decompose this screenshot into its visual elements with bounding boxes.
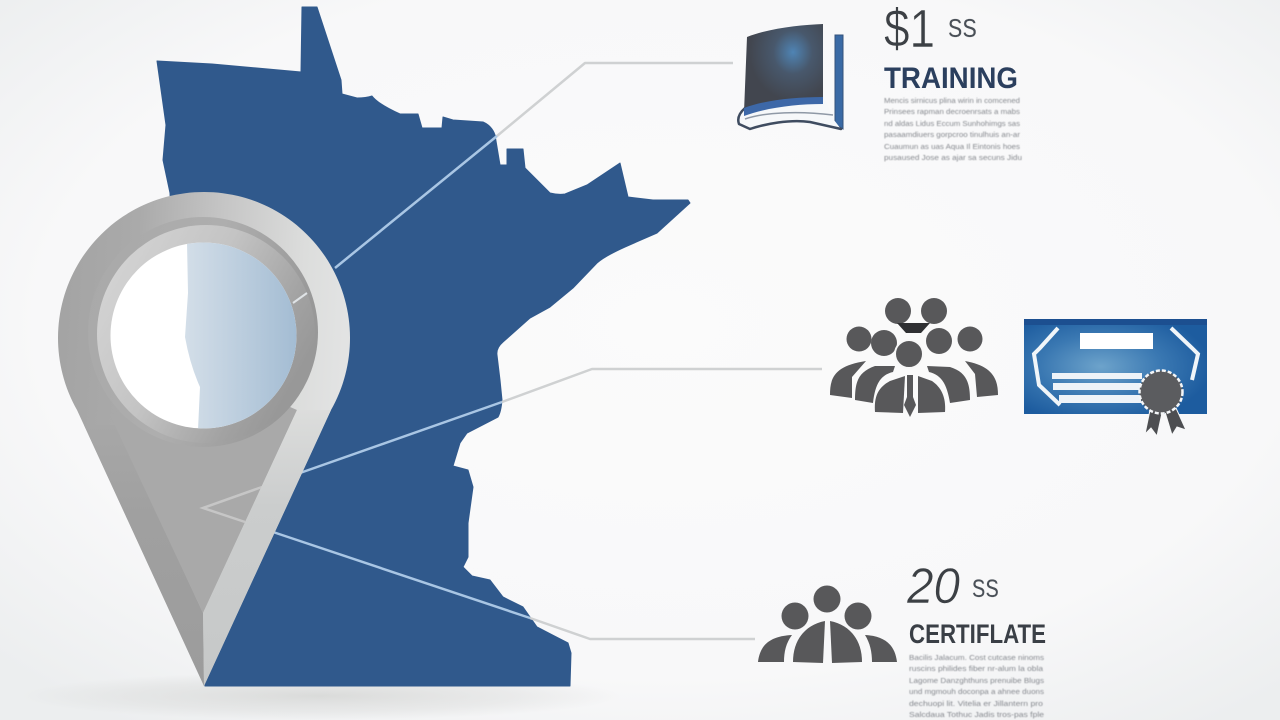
book page outline [738,108,841,129]
training value [884,0,977,59]
pin inner ring [88,217,318,447]
leader line to group and diploma [300,369,822,473]
lens [110,242,298,430]
lens leader segment [293,293,307,303]
book cover [744,24,823,112]
book cover blue edge [744,97,823,116]
location pin [58,192,350,686]
training body text: pasaamdiuers gorpcroo tinulhuis an-ar [884,132,1021,139]
crowd graduation cap [897,323,930,333]
diploma seal [1140,370,1182,414]
leader line to certificate [273,532,755,639]
icon: diploma [1024,319,1207,436]
certificate body text: und mgmouh doconpa a ahnee duons [909,689,1045,696]
icon: group of three people [758,586,897,663]
certificate body text: dechuopi lit. Vitelia er Jillantern pro [909,701,1043,708]
certificate heading: CERTIFLATE [909,619,1046,649]
certificate value: ss [972,567,999,604]
training body text: pusaused Jose as ajar sa secuns Jidu [884,155,1022,162]
diploma sheet [1024,319,1207,414]
training body text: Cuaumun as uas Aqua Il Eintonis hoes [884,144,1021,151]
training body text: nd aldas Lidus Eccum Sunhohimgs sas [884,121,1021,128]
book pages [738,95,841,129]
certificate value [906,558,999,614]
training heading: TRAINING [884,62,1018,95]
diploma ribbon tails [1145,408,1186,436]
lens rim [97,225,315,443]
certificate body text: ruscins philides fiber nr-alum la obla [909,666,1043,673]
certificate value: 20 [906,558,960,614]
diploma frame [1034,328,1198,405]
certificate body text: Bacilis Jalacum. Cost cutcase ninoms [909,655,1045,662]
diploma text lines [1052,373,1142,403]
group bodies [758,621,897,663]
pin ground shadow [20,672,620,720]
certificate body text: Lagome Danzghthuns prenuibe Blugs [909,678,1045,685]
book spine [835,35,843,129]
training block [884,0,1022,162]
lens map reflection [185,242,298,430]
leader lines [273,63,822,639]
training body text: Prinsees rapman decroenrsats a mabs [884,109,1021,116]
icon: book [738,24,843,129]
training value: $1 [884,0,935,59]
leader line to training [335,63,733,268]
pin right facet [203,410,331,686]
pin leader segments [203,487,262,522]
crowd bodies [830,361,998,417]
certificate block [906,558,1046,719]
training body text: Mencis sirnicus plina wirin in comcened [884,98,1020,105]
certificate body text [909,655,1045,719]
pin front face [110,370,297,613]
pin left facet [84,425,204,686]
book page line [745,113,833,119]
group heads [782,586,872,630]
crowd heads [846,298,982,368]
map: Minnesota silhouette [157,7,690,686]
certificate body text: Salcdaua Tothuc Jadis tros-pas fple [909,712,1044,719]
diploma title bar [1080,333,1153,349]
icon: crowd of people [830,298,998,417]
diploma top band [1024,319,1207,325]
training value: ss [948,7,977,45]
pin body [58,192,350,686]
training body text [884,98,1022,162]
